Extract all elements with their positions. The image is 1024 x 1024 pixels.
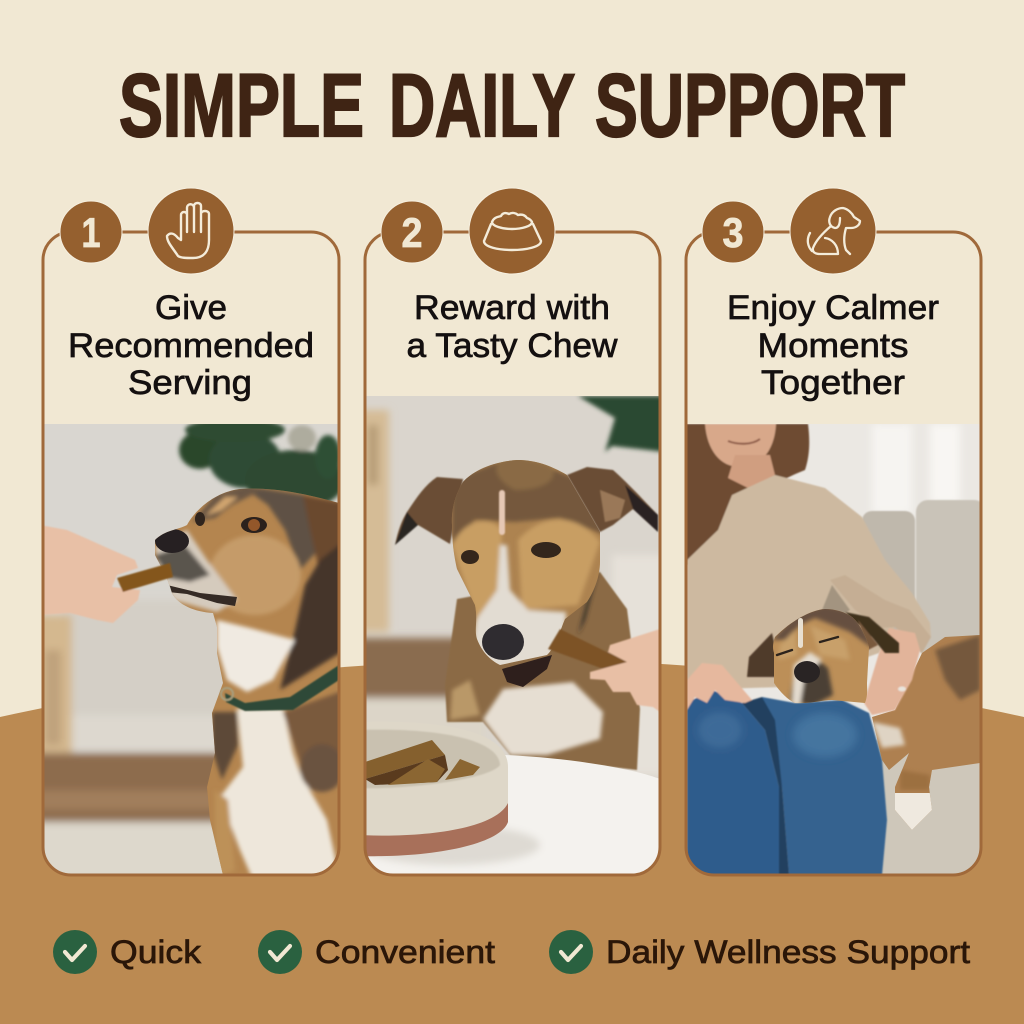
icon: hand bbox=[148, 188, 234, 274]
icon: sitting dog bbox=[790, 188, 876, 274]
dog head bbox=[773, 609, 869, 704]
step number 3: 3 bbox=[722, 209, 744, 256]
title: SIMPLE bbox=[119, 55, 364, 155]
step number 2 bbox=[381, 201, 443, 263]
benefit: convenient bbox=[258, 930, 495, 974]
sofa bbox=[862, 499, 980, 874]
card 2 background bbox=[365, 232, 660, 875]
dog bbox=[150, 480, 345, 880]
step 3 heading: Together bbox=[761, 364, 905, 402]
step 1 heading: Give bbox=[155, 289, 227, 327]
dog ears bbox=[395, 467, 658, 545]
collar bbox=[221, 665, 339, 711]
icon: check bbox=[258, 930, 302, 974]
table and bowl bbox=[360, 722, 660, 875]
title: DAILY bbox=[389, 55, 575, 155]
step 1 heading: Recommended bbox=[68, 327, 314, 365]
card 1 background bbox=[43, 232, 339, 875]
step 2 heading bbox=[406, 289, 618, 365]
step 1 heading bbox=[68, 289, 314, 402]
step number 1 bbox=[60, 201, 122, 263]
benefit: daily wellness support: Daily Wellness Support bbox=[606, 934, 970, 970]
benefit: quick bbox=[53, 930, 202, 974]
step number 3 bbox=[702, 201, 764, 263]
panel: step 3 bbox=[686, 188, 986, 880]
card 1 border bbox=[43, 232, 339, 875]
step 3 heading bbox=[727, 289, 939, 402]
benefit: quick: Quick bbox=[110, 934, 202, 970]
photo: dog eating a chew bbox=[355, 396, 667, 875]
card 2 border bbox=[365, 232, 660, 875]
dog body bbox=[872, 635, 980, 830]
step 1 heading: Serving bbox=[128, 364, 252, 402]
panel: step 2 bbox=[355, 188, 667, 875]
icon: food bowl bbox=[469, 188, 555, 274]
dog head bbox=[452, 460, 600, 665]
icon: check bbox=[53, 930, 97, 974]
icon: check bbox=[549, 930, 593, 974]
photo: woman with sleeping dog on sofa bbox=[686, 424, 986, 880]
woman bbox=[686, 424, 931, 875]
mouth bbox=[502, 655, 552, 687]
step number 2: 2 bbox=[402, 209, 422, 256]
step 2 heading: Reward with bbox=[414, 289, 610, 327]
title: SUPPORT bbox=[595, 55, 905, 155]
step 3 heading: Enjoy Calmer bbox=[727, 289, 939, 327]
step 3 heading: Moments bbox=[758, 327, 908, 365]
card 3 background bbox=[686, 232, 981, 875]
panel: step 1 bbox=[30, 188, 345, 882]
photo: hand feeding a dog a chew bbox=[30, 418, 345, 882]
hand and chew bbox=[40, 525, 173, 623]
chew and hand bbox=[548, 629, 660, 712]
card 3 border bbox=[686, 232, 981, 875]
benefit: daily wellness support bbox=[549, 930, 970, 974]
title bbox=[119, 55, 905, 155]
dog body bbox=[445, 572, 640, 770]
benefit: convenient: Convenient bbox=[315, 934, 495, 970]
dog ears bbox=[747, 612, 899, 677]
step 2 heading: a Tasty Chew bbox=[406, 327, 618, 365]
tan curved lower band bbox=[0, 660, 1024, 1024]
jeans bbox=[687, 690, 779, 875]
step number 1: 1 bbox=[82, 209, 100, 256]
hand on dog bbox=[864, 628, 920, 715]
